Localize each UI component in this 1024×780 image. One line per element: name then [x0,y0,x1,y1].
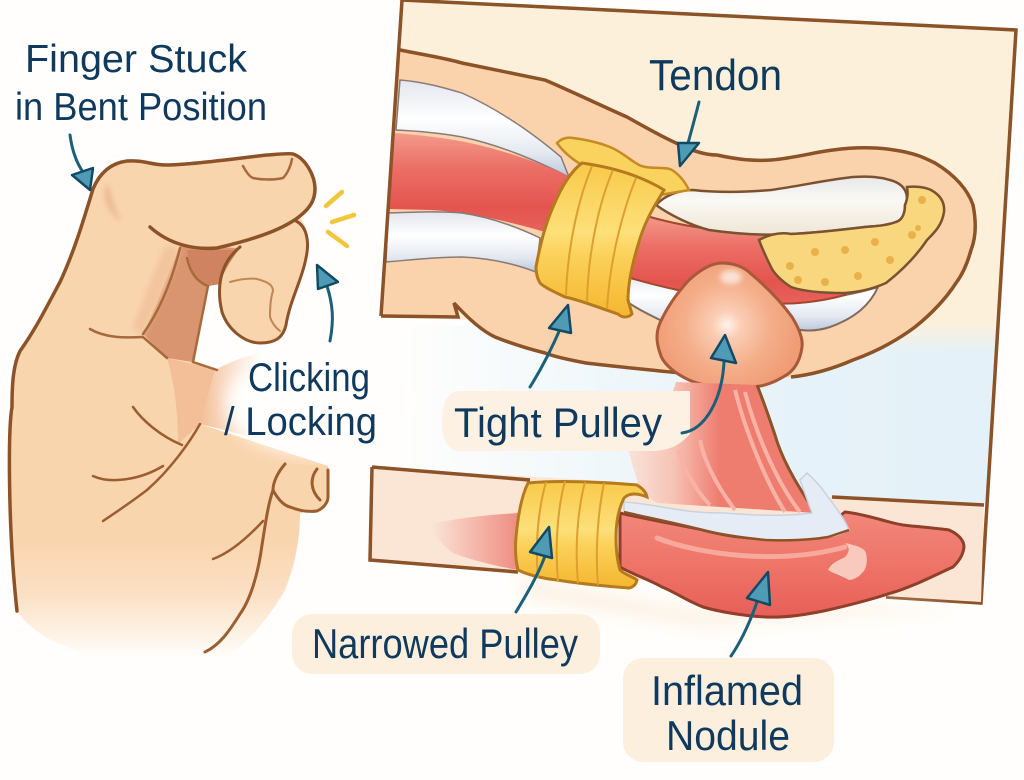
second finger outline [220,221,308,343]
icon: hand with bent finger [9,154,410,665]
light stripe on lower tendon [657,538,845,557]
panel background [381,0,1016,345]
panel: upper finger cross-section [381,0,1016,603]
label: finger stuck: Finger Stuck [25,38,248,81]
lower tendon [620,512,964,617]
arrow: inflamed nodule [731,572,770,656]
tendon beyond pulley [627,215,845,304]
icon: click lines [326,192,354,246]
panel: lower finger cross-section [370,382,984,628]
label: finger stuck [15,38,267,129]
label: clicking / locking: / Locking [224,400,377,444]
arrow: tendon [678,102,699,166]
hand shape [9,154,328,665]
narrowed pulley ring [515,481,647,588]
white tendon strip [656,177,907,235]
mid tone patch [167,358,217,444]
finger gap lines [90,248,217,370]
bottom finger outline [205,464,328,652]
second finger detail [230,279,280,331]
label: clicking / locking: Clicking [248,356,370,400]
finger skin [381,50,975,378]
highlight on tendon [828,543,867,580]
finger outline [381,50,975,377]
label: finger stuck: in Bent Position [15,86,267,129]
knuckle shading [105,182,122,222]
label background [442,391,690,451]
tight pulley ring [536,163,664,317]
panel border [381,0,1016,603]
label: inflamed nodule: Nodule [666,712,790,759]
inflamed nodule [657,263,802,388]
upper tendon [388,133,573,232]
arrow: tight pulley [530,305,571,387]
fat pad [759,187,944,293]
label: tendon: Tendon [649,51,782,100]
sheath lower edge [624,512,849,540]
upper white sheath [396,80,569,177]
fingernail [243,159,292,180]
lower white sheath [386,212,540,272]
label: tight pulley [442,391,690,451]
lower panel background [370,467,984,602]
label: clicking / locking [224,356,377,444]
fat pad dots [786,196,926,286]
lower panel border [370,467,984,572]
bottom finger [273,464,328,511]
label: narrowed pulley: Narrowed Pulley [312,620,578,667]
label: inflamed nodule: Inflamed [651,667,803,714]
label: tight pulley: Tight Pulley [454,399,662,446]
shaded web [187,250,238,286]
hand outline [9,154,315,611]
arrow: finger stuck [70,135,93,190]
dark interior between fingers [143,246,240,362]
muscle band connecting panels [628,382,816,513]
pale patch fading toward label [200,352,264,440]
palm creases [93,407,263,559]
cream glow under panel [516,575,960,628]
nodule highlight [720,270,742,284]
arrow: narrowed pulley [516,527,552,612]
arrow: to nodule [682,335,736,433]
label: inflamed nodule [623,658,834,762]
lower sheath beyond pulley [620,272,878,331]
fade around label [226,350,410,454]
sky background [392,325,1000,505]
pulley top flare [557,138,689,195]
faded left tendon [428,513,518,570]
soft sky horizon [840,322,999,352]
label: narrowed pulley [292,614,600,674]
white sheath on lower tendon [624,473,849,540]
arrow: clicking [317,265,338,341]
